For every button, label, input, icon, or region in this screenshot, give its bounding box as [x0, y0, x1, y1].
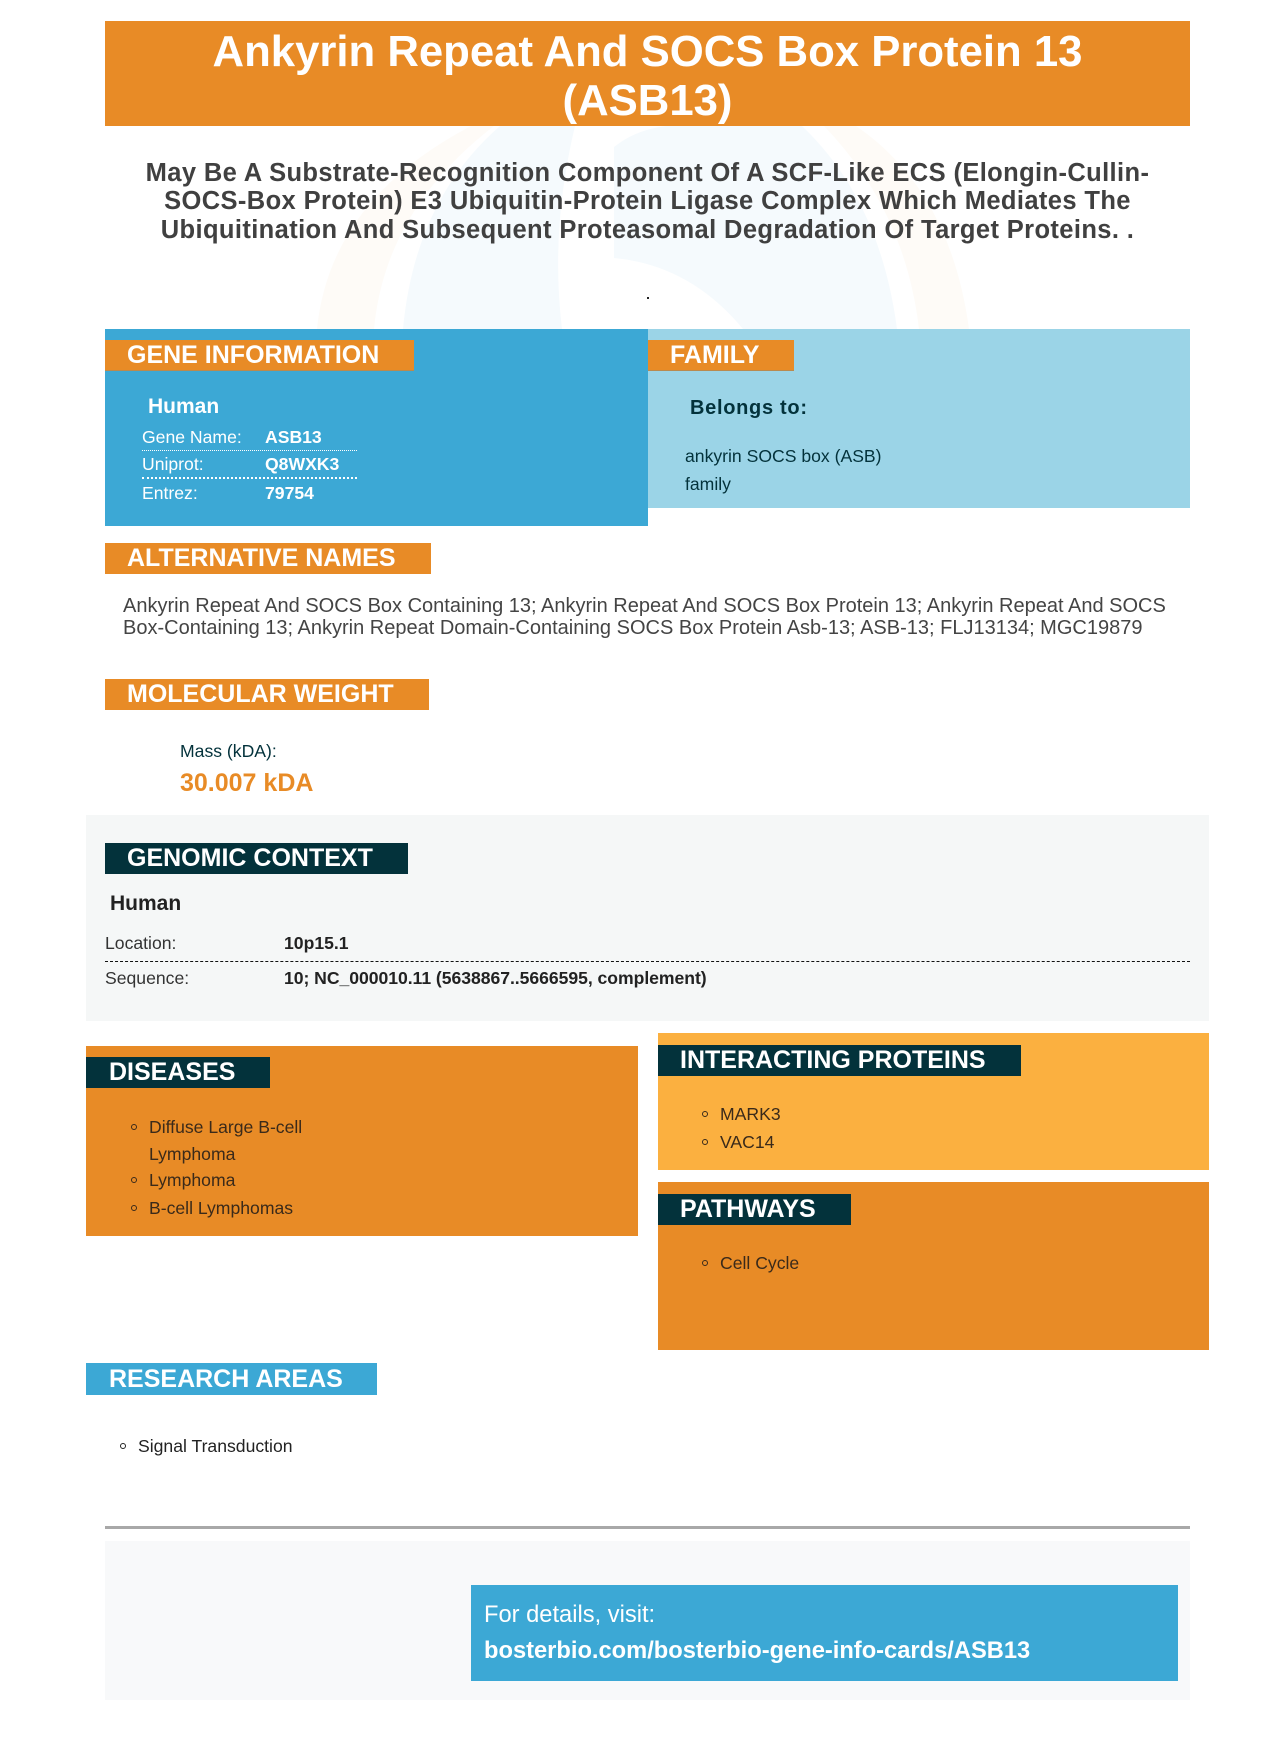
heading: gene information: GENE INFORMATION: [127, 341, 379, 369]
sequence row: Sequence:: [105, 968, 189, 988]
alternative names text: [123, 595, 1166, 639]
heading: molecular weight: MOLECULAR WEIGHT: [127, 680, 394, 708]
panel: pathways: [658, 1182, 1209, 1350]
pathways list: Cell Cycle: [720, 1253, 799, 1273]
sequence row: 10; NC_000010.11 (5638867..5666595, complement): [284, 968, 707, 988]
panel: gene information: [105, 329, 648, 526]
heading: interacting proteins: INTERACTING PROTEINS: [680, 1046, 986, 1074]
subtitle description: SOCS-Box Protein) E3 Ubiquitin-Protein Ligase Complex Which Mediates The: [164, 187, 1131, 215]
interacting proteins list: [702, 1104, 781, 1152]
family text: family: [685, 474, 731, 494]
heading: alternative names: ALTERNATIVE NAMES: [127, 544, 396, 572]
panel: family: [648, 329, 1190, 508]
heading: family: [648, 340, 794, 371]
panel: genomic context: [86, 815, 1209, 1021]
gene info table: [142, 427, 357, 503]
gene info table: Uniprot:: [142, 454, 204, 474]
gene info table: ASB13: [265, 427, 322, 447]
title banner: Ankyrin Repeat And SOCS Box Protein 13: [213, 27, 1082, 76]
alternative names text: Ankyrin Repeat And SOCS Box Containing 13; Ankyrin Repeat And SOCS Box Protein 13; Ankyrin Repeat And SOCS: [123, 595, 1166, 617]
gene info table: Q8WXK3: [265, 454, 339, 474]
details label: For details, visit:: [484, 1602, 655, 1628]
heading: family: FAMILY: [670, 341, 759, 369]
diseases list: Lymphoma: [149, 1170, 235, 1190]
species label: Human: [110, 892, 181, 915]
subtitle description: May Be A Substrate-Recognition Component Of A SCF-Like ECS (Elongin-Cullin-: [146, 159, 1149, 187]
mass label: Mass (kDA):: [180, 741, 277, 761]
title banner: [105, 21, 1190, 126]
heading: research areas: RESEARCH AREAS: [109, 1365, 343, 1393]
gene info table: 79754: [265, 483, 314, 503]
location row: 10p15.1: [284, 933, 349, 953]
panel: footer: [105, 1541, 1190, 1700]
gene info table: Gene Name:: [142, 427, 242, 447]
details callout: [471, 1585, 1178, 1681]
research areas list: Signal Transduction: [138, 1436, 293, 1456]
location row: [105, 933, 349, 953]
title banner: (ASB13): [563, 76, 732, 124]
background watermark logo: [403, 126, 897, 329]
mass value: 30.007 kDA: [180, 769, 313, 797]
diseases list: Diffuse Large B-cell: [149, 1117, 302, 1137]
diseases list: Lymphoma: [149, 1144, 235, 1164]
row divider: [105, 961, 1190, 962]
diseases list: B-cell Lymphomas: [149, 1198, 293, 1218]
heading: pathways: [658, 1194, 851, 1225]
heading: diseases: [86, 1057, 270, 1088]
family text: ankyrin SOCS box (ASB): [685, 446, 882, 466]
heading: diseases: DISEASES: [109, 1058, 235, 1086]
dot: [647, 297, 649, 299]
details link: bosterbio.com/bosterbio-gene-info-cards/ASB13: [484, 1638, 1030, 1664]
heading: genomic context: GENOMIC CONTEXT: [127, 844, 373, 872]
location row: Location:: [105, 933, 176, 953]
interacting proteins list: VAC14: [720, 1132, 774, 1152]
panel: interacting proteins: [658, 1033, 1209, 1170]
belongs to label: Belongs to:: [690, 397, 808, 419]
subtitle description: [146, 159, 1149, 244]
species label: Human: [148, 395, 219, 418]
heading: pathways: PATHWAYS: [680, 1195, 816, 1223]
alternative names text: Box-Containing 13; Ankyrin Repeat Domain-Containing SOCS Box Protein Asb-13; ASB-13; FLJ13134; MGC19879: [123, 617, 1142, 639]
family text: [685, 446, 882, 494]
diseases list: [131, 1117, 302, 1218]
footer divider: [105, 1526, 1190, 1529]
interacting proteins list: MARK3: [720, 1104, 781, 1124]
gene info table: Entrez:: [142, 483, 198, 503]
subtitle description: Ubiquitination And Subsequent Proteasomal Degradation Of Target Proteins. .: [161, 216, 1134, 244]
panel: diseases: [86, 1046, 638, 1236]
